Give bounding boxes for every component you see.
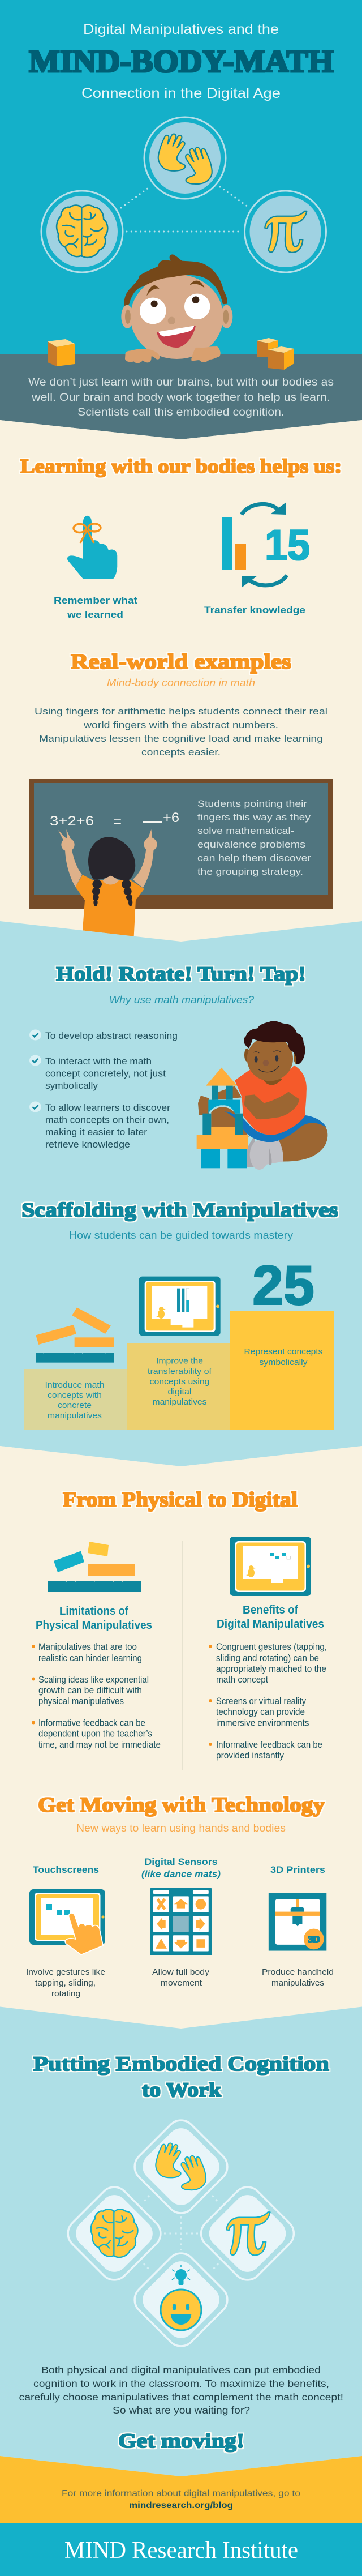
subheading: Why use math manipulatives? — [109, 994, 254, 1005]
footer — [0, 2523, 362, 2576]
logo text: MIND Research Institute — [64, 2538, 298, 2564]
step 3 — [230, 1311, 334, 1430]
icon: right cubes — [257, 338, 294, 370]
intro text — [28, 376, 334, 418]
icon: 3D printer: 3D — [308, 1934, 320, 1945]
limitations title — [36, 1605, 152, 1632]
paragraph: world fingers with the abstract numbers. — [83, 720, 278, 730]
chalk equation: +6 — [163, 810, 179, 825]
call to action: Get moving! — [118, 2429, 244, 2452]
column: touchscreens: Touchscreens — [33, 1864, 99, 1875]
step 1 — [24, 1369, 127, 1430]
label: transfer: Transfer knowledge — [204, 605, 305, 615]
check list: math concepts on their own, — [45, 1114, 169, 1126]
heading: to Work — [142, 2078, 221, 2101]
limitations title: Physical Manipulatives — [36, 1619, 152, 1632]
label: remember: we learned — [67, 609, 123, 620]
panel: header — [0, 0, 362, 439]
panel: putting embodied cognition to work — [0, 2006, 362, 2476]
benefits list: appropriately matched to the — [216, 1664, 326, 1674]
check list — [29, 1029, 178, 1150]
subheading: Mind-body connection in math — [107, 677, 255, 688]
icon: pi circle — [244, 191, 326, 272]
intro text: well. Our brain and body work together to help us learn. — [31, 392, 330, 404]
icon: brain diamond — [62, 2181, 167, 2286]
heading — [33, 2052, 329, 2101]
icon: brain circle — [41, 191, 123, 272]
icon: smiley diamond with bulb — [128, 2247, 234, 2352]
benefits list: technology can provide — [216, 1707, 305, 1717]
link text: For more information about digital manipulatives, go to — [62, 2489, 300, 2498]
chalk equation: = — [113, 814, 122, 829]
icon: left cube — [48, 339, 75, 366]
paragraph: Manipulatives lessen the cognitive load and make learning — [39, 733, 323, 744]
column: 3D printers — [262, 1864, 334, 1988]
heading: Learning with our bodies helps us: — [20, 455, 342, 477]
paragraph — [19, 2364, 343, 2416]
limitations title: Limitations of — [59, 1605, 128, 1618]
caption: tapping, sliding, — [35, 1979, 96, 1988]
paragraph: Both physical and digital manipulatives can put embodied — [41, 2364, 321, 2376]
heading: From Physical to Digital — [63, 1488, 298, 1512]
icon: hands diamond — [128, 2114, 234, 2219]
limitations list: physical manipulatives — [38, 1696, 124, 1706]
panel: more information — [0, 2456, 362, 2523]
chalk equation — [50, 810, 179, 829]
illustration: child building blocks — [197, 1021, 327, 1170]
heading: Putting Embodied Cognition — [33, 2052, 329, 2075]
dotted connectors — [121, 187, 249, 232]
caption: Produce handheld — [262, 1968, 334, 1977]
illustration: concrete blocks — [36, 1307, 114, 1363]
board text: equivalence problems — [197, 839, 305, 850]
illustration: girl at board — [58, 829, 157, 936]
check list: To interact with the math — [45, 1056, 152, 1067]
paragraph: So what are you waiting for? — [113, 2404, 250, 2416]
subheading: How students can be guided towards mastery — [69, 1230, 293, 1241]
caption: manipulatives — [272, 1979, 324, 1988]
icon: pi diamond — [195, 2181, 300, 2286]
benefits list: Congruent gestures (tapping, — [216, 1642, 327, 1652]
board text: the grouping strategy. — [197, 866, 303, 877]
number 25: 25 — [252, 1254, 314, 1316]
column: digital sensors: Digital Sensors — [145, 1856, 217, 1867]
step 2: Improve the — [156, 1357, 203, 1366]
benefits list: Screens or virtual reality — [216, 1696, 307, 1706]
heading: Hold! Rotate! Turn! Tap! — [56, 962, 306, 985]
paragraph — [35, 706, 327, 758]
paragraph: cognition to work in the classroom. To maximize the benefits, — [33, 2378, 329, 2389]
caption — [152, 1968, 210, 1988]
paragraph: Using fingers for arithmetic helps students connect their real — [35, 706, 327, 717]
limitations list — [32, 1642, 161, 1750]
paragraph: carefully choose manipulatives that complement the math concept! — [19, 2391, 343, 2403]
caption: Involve gestures like — [26, 1968, 105, 1977]
chalkboard — [29, 779, 333, 909]
step 1: manipulatives — [48, 1411, 102, 1420]
icon: hands circle — [144, 117, 226, 199]
illustration: physical blocks — [48, 1542, 141, 1592]
step 3: Represent concepts — [244, 1347, 322, 1357]
benefits list: sliding and rotating) can be — [216, 1653, 319, 1663]
illustration: tablet — [139, 1277, 221, 1336]
chalk equation: 3+2+6 — [50, 814, 94, 829]
benefits list: provided instantly — [216, 1751, 285, 1761]
icon: transfer knowledge: 15 — [265, 521, 310, 570]
icon: dance mat — [150, 1888, 212, 1955]
illustration: digital tablet — [230, 1537, 311, 1596]
check list: making it easier to later — [45, 1127, 147, 1137]
caption: Allow full body — [152, 1968, 210, 1977]
column: digital sensors — [141, 1856, 221, 1988]
title: main heading: MIND-BODY-MATH — [29, 44, 334, 79]
benefits list: Informative feedback can be — [216, 1740, 322, 1750]
icon: finger with bow — [67, 516, 117, 579]
caption — [26, 1968, 105, 1999]
check list: concept concretely, not just — [45, 1068, 166, 1079]
step 1: Introduce math — [45, 1380, 104, 1390]
intro text: Scientists call this embodied cognition. — [77, 406, 285, 418]
step 1: concrete — [58, 1401, 92, 1410]
table band — [0, 354, 362, 439]
heading: get moving: Get Moving with Technology — [38, 1794, 325, 1817]
column: 3D printers: 3D Printers — [270, 1864, 325, 1875]
caption: rotating — [51, 1989, 80, 1999]
check list: To develop abstract reasoning — [45, 1030, 178, 1041]
label: remember — [54, 595, 137, 620]
board text — [197, 798, 311, 877]
panel: hold rotate turn tap — [0, 921, 362, 1466]
board text: Students pointing their — [197, 798, 307, 809]
benefits list: math concept — [216, 1675, 268, 1685]
benefits list — [209, 1642, 327, 1761]
paragraph: concepts easier. — [141, 747, 221, 758]
dotted connectors — [144, 2196, 218, 2270]
check list: retrieve knowledge — [45, 1139, 130, 1150]
limitations list: Informative feedback can be — [38, 1718, 145, 1728]
benefits title — [217, 1604, 324, 1631]
step 3: symbolically — [259, 1358, 308, 1367]
column: digital sensors: (like dance mats) — [141, 1868, 221, 1880]
heading: scaffolding: Scaffolding with Manipulatives — [21, 1199, 338, 1221]
illustration: smiling boy — [121, 254, 232, 363]
heading: real-world examples: Real-world examples — [71, 651, 291, 674]
icon: touch tablet — [29, 1889, 105, 1955]
step 2: transferability of — [148, 1367, 212, 1376]
benefits list: immersive environments — [216, 1718, 309, 1728]
label: remember: Remember what — [54, 595, 137, 606]
icon: transfer knowledge — [222, 502, 310, 588]
check list: To allow learners to discover — [45, 1102, 170, 1113]
title: line 1: Digital Manipulatives and the — [83, 22, 279, 37]
link: mindresearch.org/blog — [129, 2501, 233, 2510]
subheading: New ways to learn using hands and bodies — [76, 1822, 286, 1834]
limitations list: Scaling ideas like exponential — [38, 1675, 149, 1685]
limitations list: realistic can hinder learning — [38, 1653, 142, 1663]
caption — [262, 1968, 334, 1988]
step 2 — [127, 1343, 231, 1430]
icon: 3D printer — [269, 1893, 326, 1951]
step 2: digital — [167, 1387, 191, 1397]
board text: can help them discover — [197, 853, 311, 863]
limitations list: Manipulatives that are too — [38, 1642, 137, 1652]
check list: symbolically — [45, 1080, 98, 1091]
benefits title: Digital Manipulatives — [217, 1618, 324, 1631]
caption: movement — [161, 1979, 202, 1988]
board text: fingers this way as they — [197, 812, 311, 823]
column: touchscreens — [26, 1864, 105, 1999]
step 1: concepts with — [48, 1390, 102, 1400]
limitations list: dependent upon the teacher’s — [38, 1729, 152, 1739]
benefits title: Benefits of — [243, 1604, 298, 1616]
panel: physical to digital — [0, 1446, 362, 2029]
board text: solve mathematical- — [197, 825, 294, 836]
step 2: concepts using — [149, 1377, 209, 1387]
title: line 3: Connection in the Digital Age — [81, 85, 281, 101]
intro text: We don’t just learn with our brains, but with our bodies as — [28, 376, 334, 388]
limitations list: time, and may not be immediate — [38, 1740, 161, 1750]
step 2: manipulatives — [153, 1397, 207, 1407]
limitations list: growth can be difficult with — [38, 1685, 142, 1696]
panel: learning with our bodies — [0, 420, 362, 942]
